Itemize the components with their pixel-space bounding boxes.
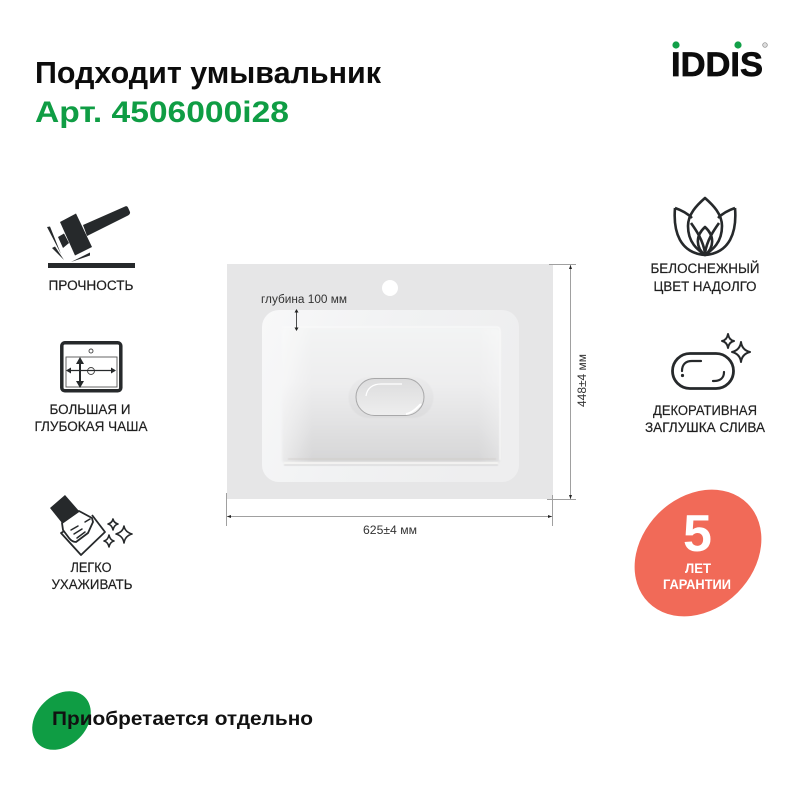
- badge: 5 year warranty: 5: [683, 505, 712, 563]
- logo: IDDIS: IDDIS: [671, 46, 763, 84]
- depth annotation: [261, 294, 347, 331]
- feature: large deep bowl: [34, 343, 148, 434]
- badge: 5 year warranty: [609, 464, 787, 642]
- height dimension: 448±4 мм: [575, 354, 589, 407]
- width dimension: [226, 493, 552, 537]
- bowl outer: [262, 310, 519, 482]
- icon: hammer: [47, 206, 135, 268]
- height dimension: [547, 264, 589, 500]
- feature: strength: [47, 206, 135, 293]
- note: sold separately: [20, 679, 313, 762]
- sink countertop: [227, 264, 553, 499]
- feature: easy care: [50, 495, 133, 592]
- faucet hole: [382, 280, 398, 296]
- feature: easy care: УХАЖИВАТЬ: [52, 577, 133, 592]
- label: БЕЛОСНЕЖНЫЙ: [650, 261, 760, 276]
- icon: hand with cloth and sparkles: [50, 495, 132, 555]
- icon: drain plug with sparkles: [672, 334, 750, 388]
- feature: snow-white colour: [650, 198, 760, 294]
- label: ЛЕГКО: [70, 560, 112, 575]
- icon: lotus: [675, 198, 735, 255]
- label: БОЛЬШАЯ И: [50, 402, 130, 417]
- feature: snow-white colour: ЦВЕТ НАДОЛГО: [654, 279, 756, 294]
- feature: decorative drain cover: ЗАГЛУШКА СЛИВА: [645, 420, 765, 435]
- feature: decorative drain cover: [645, 334, 765, 435]
- panel: sink product image: [227, 264, 553, 499]
- depth annotation: глубина 100 мм: [261, 294, 347, 306]
- drain cover: [348, 377, 434, 418]
- badge: 5 year warranty: ГАРАНТИИ: [663, 577, 731, 592]
- badge: 5 year warranty: ЛЕТ: [685, 561, 712, 576]
- rim highlights: [282, 327, 500, 465]
- bowl floor: [282, 328, 500, 463]
- label: ДЕКОРАТИВНАЯ: [653, 403, 757, 418]
- icon: sink with arrows: [62, 343, 121, 391]
- note: sold separately: Приобретается отдельно: [52, 709, 313, 730]
- label: ПРОЧНОСТЬ: [48, 278, 134, 293]
- feature: large deep bowl: ГЛУБОКАЯ ЧАША: [34, 419, 148, 434]
- width dimension: 625±4 мм: [363, 523, 417, 537]
- title: Подходит умывальник: [35, 55, 381, 90]
- article number: Арт. 4506000i28: [35, 96, 289, 129]
